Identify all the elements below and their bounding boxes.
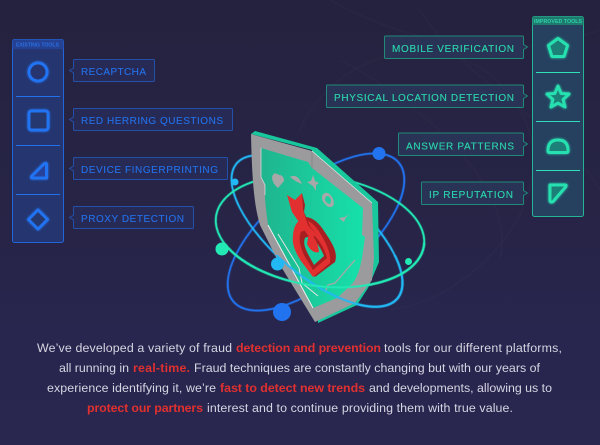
- label: red herring questions: [70, 108, 232, 130]
- panel: existing tools: [12, 40, 64, 242]
- icon: star: [547, 86, 569, 107]
- panel header: existing tools: EXISTING TOOLS: [16, 42, 60, 48]
- orbits in front of shield: [225, 243, 426, 308]
- icon: corner wedge: [550, 185, 566, 202]
- panel header: improved tools: IMPROVED TOOLS: [534, 19, 583, 25]
- orbits behind shield: [202, 126, 432, 338]
- description paragraph: fast to detect new trends: [220, 381, 365, 395]
- icon: square: [29, 111, 48, 130]
- label: mobile verification: MOBILE VERIFICATION: [392, 44, 514, 55]
- label: proxy detection: PROXY DETECTION: [81, 214, 184, 225]
- red target with arrow: [287, 193, 336, 277]
- label: reCAPTCHA: RECAPTCHA: [81, 67, 146, 78]
- description paragraph: interest and to continue providing them with true value.: [207, 401, 513, 415]
- description paragraph: and developments, allowing us to: [369, 381, 552, 395]
- description paragraph: all running in: [59, 361, 129, 375]
- label: physical location detection: PHYSICAL LOCATION DETECTION: [334, 93, 514, 104]
- label: IP reputation: IP REPUTATION: [429, 190, 513, 201]
- description paragraph: We’ve developed a variety of fraud: [37, 341, 232, 355]
- icon: circle: [29, 63, 47, 81]
- icon: half circle: [548, 140, 568, 152]
- description paragraph: experience identifying it, we’re: [47, 381, 216, 395]
- description paragraph: tools for our different platforms,: [384, 341, 562, 355]
- label: answer patterns: [398, 133, 528, 156]
- panel header: existing tools: [12, 40, 64, 49]
- shield small icons: [272, 173, 349, 222]
- label: mobile verification: [384, 36, 528, 58]
- icon: pentagon: [548, 38, 568, 56]
- description paragraph: detection and prevention: [236, 341, 381, 355]
- label: device fingerprinting: [70, 158, 228, 180]
- description paragraph: protect our partners: [87, 401, 203, 415]
- icon: wedge: [31, 163, 46, 178]
- label: device fingerprinting: DEVICE FINGERPRINTING: [81, 165, 218, 176]
- description paragraph: real-time.: [133, 361, 190, 375]
- label: IP reputation: [422, 182, 528, 204]
- shield illustration: [251, 131, 379, 323]
- panel: improved tools: [532, 16, 584, 216]
- orbit nodes behind shield: [232, 147, 386, 321]
- label: red herring questions: RED HERRING QUESTIONS: [81, 116, 223, 127]
- icon: diamond: [28, 210, 48, 229]
- label: answer patterns: ANSWER PATTERNS: [406, 142, 514, 152]
- label: reCAPTCHA: [70, 60, 154, 82]
- panel header: improved tools: [532, 16, 584, 25]
- label: proxy detection: [70, 206, 194, 228]
- label: physical location detection: [326, 85, 528, 108]
- description paragraph: [37, 341, 562, 415]
- orbit nodes in front of shield: [216, 242, 412, 270]
- description paragraph: Fraud techniques are constantly changing but with our years of: [194, 361, 541, 375]
